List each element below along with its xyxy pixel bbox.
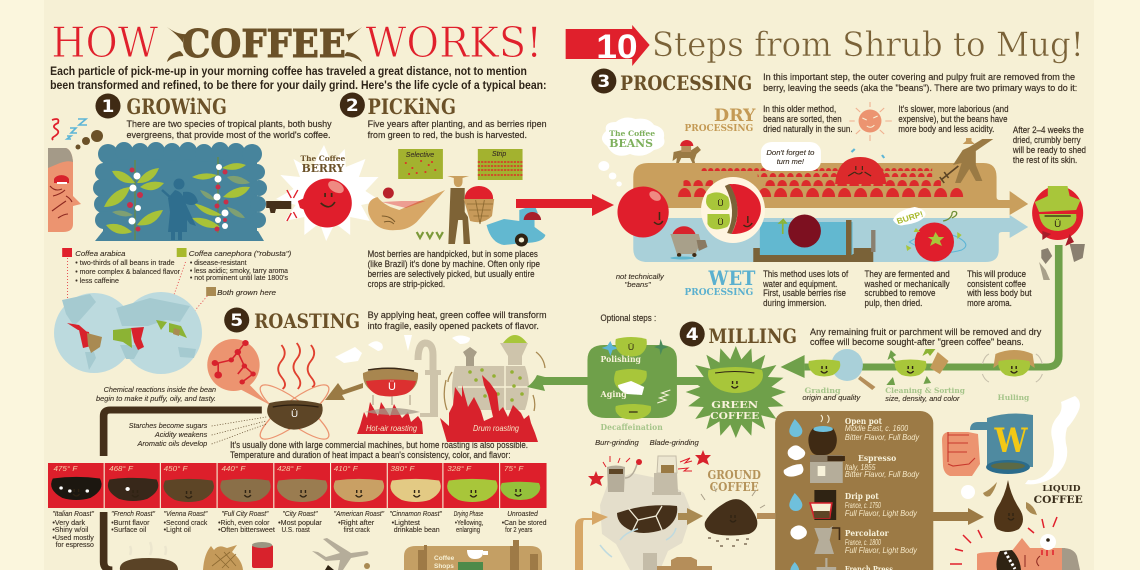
step 2: picking heading: Five years after planting, and as berries ripen (368, 118, 547, 129)
icon: roasting bean with orbits (253, 378, 336, 446)
brown arrow from roasters to bean (325, 335, 470, 400)
icon: hulled berry (1032, 186, 1085, 280)
brew: percolator: Full Flavor, Light Body (845, 545, 918, 555)
panel: optional steps: Polishing (601, 354, 641, 364)
chart: roast temperature strip: 468° F (109, 464, 134, 473)
icon: cleaning and sorting bean: size, density, and color (885, 394, 960, 403)
icon: berry cutaway with beans (701, 177, 765, 243)
text: drying duration: the rest of its skin. (1013, 154, 1077, 165)
banner: 10 steps heading: Steps from Shrub to Mug! (652, 25, 1084, 65)
labels: grinding methods: Burr-grinding (595, 438, 639, 447)
step 3: processing heading: PROCESSING (620, 71, 752, 95)
brew: drip pot (789, 490, 918, 520)
title: How Coffee Works: COFFEE (182, 23, 346, 67)
label: ground coffee: GROUND (707, 468, 761, 482)
step 1: growing heading: There are two species of tropical plants, both bushy (127, 118, 332, 129)
chart: roast temperature strip: 450° F (164, 464, 189, 473)
icon: awake face (950, 517, 1080, 570)
brew: percolator: Percolator (845, 528, 889, 538)
labels: roast names and notes: •Shiny w/oil (52, 525, 89, 534)
text: dry method: beans are sorted, then (763, 113, 842, 124)
icon: picking machine (417, 205, 545, 246)
text: dry method: expensive), but the beans have (898, 113, 1007, 124)
process band: dry path (633, 138, 1028, 215)
step 2: picking heading: 2 (346, 96, 359, 116)
note: not technically beans: "beans" (625, 280, 652, 289)
step 5: roasting heading (224, 308, 547, 333)
thought cloud: the coffee beans: The Coffee (609, 129, 655, 138)
label: dry processing: PROCESSING (685, 123, 753, 134)
labels: roast names and notes: drinkable bean (394, 525, 440, 534)
text: wet method columns: more aroma. (967, 297, 1012, 308)
step 1: growing heading: 1 (102, 97, 114, 117)
labels: roast names and notes: first crack (344, 525, 370, 534)
text: wet method columns: with less body but (966, 287, 1032, 298)
brew: percolator (790, 525, 918, 555)
legend: coffee species: Coffea canephora ("robusta") (189, 249, 292, 258)
chart: roast temperature strip (48, 463, 547, 508)
thought cloud: the coffee beans: BEANS (609, 136, 653, 150)
panel: optional steps: Decaffeination (601, 422, 663, 432)
legend: coffee species: • not prominent until late 1800's (190, 273, 288, 282)
note: not technically beans: not technically (616, 272, 665, 281)
step 3: processing heading: berry, leaving the seeds (aka the "beans"). There are two primary ways to do it: (763, 82, 1077, 93)
legend: coffee species: • less caffeine (75, 276, 119, 285)
step 1: growing heading: evergreens, that provide most of the world's coffee. (127, 129, 331, 140)
icon: grading bean with magnifier (802, 349, 875, 402)
chart: roast temperature strip: 328° F (447, 464, 472, 473)
text: roasting temperature intro: It's usually done with large commercial machines, but home roasting is also possible. (230, 439, 528, 450)
brew: drip pot: Full Flavor, Light Body (845, 508, 918, 518)
icon: coffee berry starburst (266, 145, 381, 241)
text: wet method columns: during immersion. (763, 297, 826, 308)
icon: hulled berry: Ü (1054, 218, 1061, 229)
label: dry processing: DRY (714, 106, 756, 126)
banner: 10 steps heading: 10 (596, 27, 638, 66)
labels: roast names and notes: •Most popular (278, 518, 322, 527)
labels: roast names and notes: enlarging (456, 525, 480, 534)
labels: roast names and notes: "Vienna Roast" (164, 509, 208, 518)
labels: roast names and notes: •Burnt flavor (111, 518, 150, 527)
step 3: processing heading: In this important step, the outer covering and pulpy fruit are removed from the (763, 71, 1075, 82)
brew: espresso: Bitter Flavor, Full Body (845, 469, 920, 479)
icon: fermenting berry (893, 207, 962, 262)
step 5: roasting heading: into fragile, easily opened packets of flavor. (368, 320, 539, 331)
step 5: roasting heading: ROASTING (254, 309, 360, 333)
labels: roast names and notes: for espresso (56, 540, 94, 549)
step 5: roasting heading: By applying heat, green coffee will transform (368, 309, 547, 320)
text: drying duration: After 2–4 weeks the (1013, 124, 1084, 135)
labels: roast names and notes: Unroasted (507, 509, 538, 518)
icon: hand picking berry (368, 188, 445, 230)
icon: green coffee starburst (686, 346, 786, 438)
labels: roast names and notes: "French Roast" (111, 509, 156, 518)
labels: roast names and notes: •Yellowing, (455, 518, 483, 527)
step 3: processing heading: 3 (597, 72, 610, 92)
label: wet processing: PROCESSING (685, 287, 753, 298)
chart: roast temperature strip: 440° F (221, 464, 247, 473)
step 2: picking heading (340, 92, 547, 140)
labels: roast names and notes: •Very dark (52, 518, 85, 527)
icon: hot-air roaster: Hot-air roasting (366, 424, 418, 433)
icon: fermenting berry: BURP! (895, 209, 924, 226)
icon: cleaning and sorting bean (885, 349, 965, 403)
chart: roast temperature strip: 380° F (391, 464, 416, 473)
labels: roast names and notes: U.S. roast (281, 525, 310, 534)
speech bubble: don't forget to turn me (761, 142, 821, 171)
icon: hulling bean: Hulling (998, 393, 1030, 402)
icons: packaged roasted coffee row: Shops (434, 563, 454, 570)
text: wet method columns: water and equipment. (762, 278, 837, 289)
chart: roast temperature strip: 475° F (53, 464, 79, 473)
brew: espresso: Italy, 1855 (845, 462, 876, 472)
labels: roast names and notes: •Lightest (392, 518, 421, 527)
icon: grading bean with magnifier: Grading (805, 386, 841, 395)
panel: coffee plant cloud (93, 142, 267, 241)
legend: coffee species: • less acidic; smoky, tarry aroma (190, 266, 289, 275)
map: world globes (54, 292, 202, 374)
step 4: milling heading: Any remaining fruit or parchment will be removed and dry (810, 326, 1042, 337)
green arrow from green coffee to roaster (527, 375, 570, 391)
labels: roast names and notes: •Rich, even color (218, 518, 270, 527)
label: wet processing (685, 266, 756, 298)
text: wet method columns: pulp, then dried. (865, 297, 922, 308)
label: optional steps: Optional steps : (601, 312, 656, 323)
title: How Coffee Works (51, 19, 542, 68)
icon: roasting bean with orbits: Ü (291, 408, 298, 419)
text: wet method columns: This method uses lots of (763, 268, 849, 279)
brew: espresso (784, 445, 920, 483)
text: roasting temperature intro: Temperature and duration of heat impact a bean's consistency, color, and flavor: (230, 449, 511, 460)
labels: grinding methods (595, 438, 699, 447)
step 1: growing heading (95, 94, 332, 140)
intro text: been transformed and refined, to be there for your daily grind. Here's the life cycle of a typical bean: (50, 78, 547, 92)
text: wet method columns: This will produce (967, 268, 1026, 279)
icon: liquid coffee drop (961, 480, 1037, 532)
icon: grinding splash and grinders (588, 450, 712, 570)
icon: mine cart with berries (670, 226, 707, 260)
step 3: processing heading (591, 68, 1077, 95)
legend: coffee species: Coffea arabica (75, 249, 126, 258)
label: wet processing: WET (708, 266, 756, 290)
icon: selective picking swatch (398, 149, 443, 179)
step 2: picking heading: from green to red, the bush is harvested. (368, 129, 527, 140)
panel: brewing methods (775, 411, 933, 570)
brew: open pot: Middle East, c. 1600 (845, 423, 908, 433)
icon: heat squiggles (278, 343, 314, 389)
caption: chemical reactions: begin to make it puffy, oily, and tasty. (96, 394, 216, 403)
brew: percolator: France, c. 1800 (845, 537, 881, 547)
chart: roast temperature strip: 428° F (277, 464, 302, 473)
text: wet method columns: First, usable berries rise (763, 287, 846, 298)
labels: roast names and notes: "Full City Roast" (221, 509, 269, 518)
icon: strip picking swatch (478, 149, 523, 180)
labels: roast names and notes: Drying Phase (454, 509, 484, 518)
labels: roast names and notes: for 2 years (505, 525, 532, 534)
labels: roast names and notes: "American Roast" (334, 509, 385, 518)
text: drying duration: will be ready to shed (1012, 144, 1086, 155)
labels: roast names and notes: •Used mostly (52, 533, 94, 542)
labels: roast names and notes: •Can be stored (502, 518, 547, 527)
labels: roast names and notes: •Often bittersweet (218, 525, 276, 534)
label: ground coffee (707, 468, 761, 494)
note: not technically beans (616, 272, 665, 289)
caption: chemical reactions: Chemical reactions inside the bean (104, 385, 217, 394)
text: drying duration: dried, crumbly berry (1013, 134, 1081, 145)
text: wet method columns: They are fermented and (865, 268, 950, 279)
step 2: picking heading: PICKiNG (368, 95, 456, 120)
speech bubble: don't forget to turn me: turn me! (777, 157, 805, 166)
step 4: milling heading: 4 (686, 325, 699, 345)
icon: coffee berry starburst: BERRY (302, 161, 345, 175)
icon: strip picking swatch: Strip (492, 149, 507, 158)
brown arrow to mug drop (933, 508, 984, 525)
icon: drum roaster (440, 335, 545, 442)
brew: espresso: Espresso (858, 453, 897, 463)
icon: coffee mug with hand (942, 414, 1033, 476)
icon: berry cutaway with beans: Ü (717, 198, 724, 208)
labels: roast names and notes: •Surface oil (111, 525, 146, 534)
chart: roast temperature strip: 410° F (334, 464, 359, 473)
step 4: milling heading (680, 322, 1042, 348)
legend: coffee species (62, 248, 292, 332)
step 5: roasting heading: 5 (230, 311, 243, 331)
step 4: milling heading: MILLING (709, 324, 797, 348)
labels: roast names and notes: •Right after (338, 518, 374, 527)
brew: drip pot: France, c. 1750 (845, 500, 881, 510)
text: drying duration (1012, 124, 1086, 165)
icon: sun (849, 102, 892, 141)
label: liquid coffee: COFFEE (1034, 493, 1083, 506)
panel: optional steps: Ü (628, 342, 634, 352)
labels: roast names and notes (52, 509, 547, 549)
legend: coffee species: Both grown here (217, 288, 277, 297)
intro text: Each particle of pick-me-up in your morning coffee has traveled a great distance, not to mention (50, 64, 527, 78)
icons: packaged roasted coffee row (120, 538, 542, 570)
labels: roast names and notes: "Italian Roast" (52, 509, 95, 518)
icon: sleeping face with thought bubbles (48, 119, 103, 232)
labels: roast names and notes: •Light oil (164, 525, 191, 534)
green pipe from processing to milling (781, 245, 1059, 378)
red arrow to processing (516, 194, 614, 216)
arrows: into and out of grinding (575, 508, 775, 570)
legend: coffee species: • two-thirds of all beans in trade (75, 258, 175, 267)
text: wet method columns: scrubbed to remove (865, 287, 935, 298)
legend: coffee species: • more complex & balanced flavor (75, 267, 180, 276)
text: dry method: dried naturally in the sun. (763, 123, 853, 134)
text: dry method: more body and less acidity. (898, 123, 994, 134)
text: picking details: Most berries are handpicked, but in some places (368, 248, 538, 259)
step 1: growing heading: GROWiNG (127, 95, 227, 120)
icon: drum roaster: Drum roasting (473, 424, 519, 433)
icon: green coffee starburst: COFFEE (710, 411, 760, 422)
icon: coffee berry starburst: The Coffee (301, 154, 345, 163)
icon: hot-air roaster (357, 343, 441, 434)
brown pipe from bean downward (104, 410, 262, 570)
panel: optional steps: Aging (600, 389, 627, 399)
icon: whole coffee berry (617, 186, 669, 238)
legend: coffee species: • disease-resistant (190, 258, 247, 267)
chart: roast temperature strip: 75° F (504, 464, 525, 473)
icon: grading bean with magnifier: origin and quality (802, 393, 861, 402)
icon: berry cutaway with beans: Ü (717, 217, 724, 227)
icon: coffee mug with hand: W (994, 421, 1028, 461)
brew: open pot: Bitter Flavor, Full Body (845, 432, 920, 442)
icon: hulling bean (982, 350, 1042, 402)
text: dry method: In this older method, (763, 103, 836, 114)
text: picking details: berries are selectively picked, but usually entire (368, 268, 535, 279)
text: dry method (763, 103, 1009, 134)
icon: ground coffee mound (701, 486, 765, 546)
step 4: milling heading: coffee will become sought-after "green coffee" beans. (810, 336, 1024, 347)
text: picking details: crops are strip-picked. (368, 278, 445, 289)
icon: horse rider (673, 140, 701, 168)
label: liquid coffee (1034, 483, 1083, 506)
brew: french press (790, 558, 893, 570)
icon: molecule speech bubble (207, 339, 268, 404)
caption: chemical reactions (96, 385, 217, 403)
text: wet method columns (762, 268, 1032, 308)
brew: open pot (789, 415, 920, 455)
icon: steam (1025, 396, 1080, 484)
text: picking details: (like Brazil) it's done by machine. Often only ripe (368, 258, 540, 269)
labels: roast names and notes: "City Roast" (283, 509, 318, 518)
panel: optional steps (570, 337, 701, 432)
icon: hot-air roaster: Ü (388, 381, 396, 393)
brew: drip pot: Drip pot (845, 491, 879, 501)
bean changes list (129, 417, 266, 448)
icon: green coffee starburst: GREEN (711, 400, 758, 411)
text: roasting temperature intro (230, 439, 528, 460)
labels: roast names and notes: •Second crack (164, 518, 207, 527)
label: ground coffee: COFFEE (710, 480, 759, 494)
bean changes list: Acidity weakens (154, 430, 207, 439)
bean changes list: Starches become sugars (129, 421, 207, 430)
speech bubble: don't forget to turn me: Don't forget to (766, 148, 815, 157)
process band: wet path (633, 214, 1028, 262)
icon: selective picking swatch: Selective (406, 150, 435, 159)
title: How Coffee Works: WORKS! (365, 19, 542, 68)
label: dry processing (685, 106, 756, 134)
labels: grinding methods: Blade-grinding (650, 438, 699, 447)
intro text (50, 64, 547, 92)
icon: farmer with basket (447, 176, 494, 244)
text: picking details (368, 248, 540, 289)
icons: packaged roasted coffee row: Coffee (434, 555, 455, 562)
text: wet method columns: washed or mechanically (864, 278, 950, 289)
brew: open pot: Open pot (845, 416, 882, 426)
label: liquid coffee: LIQUID (1042, 483, 1081, 493)
bean changes list: Aromatic oils develop (137, 439, 208, 448)
labels: roast names and notes: "Cinnamon Roast" (389, 509, 443, 518)
title: How Coffee Works: HOW (51, 19, 159, 68)
text: wet method columns: consistent coffee (967, 278, 1026, 289)
thought cloud: the coffee beans (598, 118, 664, 186)
icon: cleaning and sorting bean: Cleaning & Sorting (885, 386, 965, 395)
text: dry method: It's slower, more laborious (and (898, 103, 1009, 114)
